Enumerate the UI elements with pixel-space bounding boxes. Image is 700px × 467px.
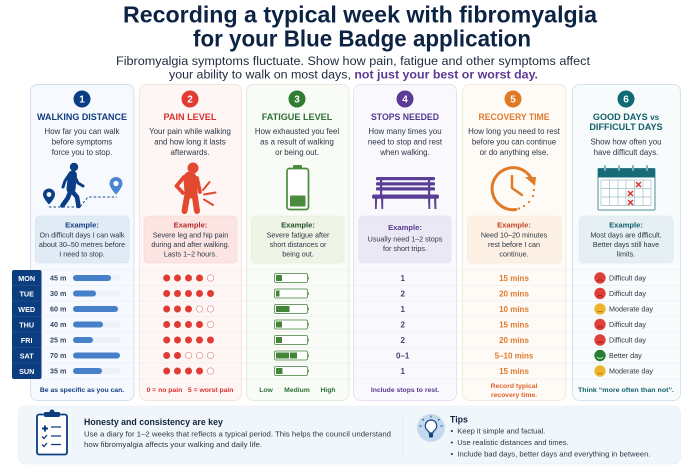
- weekday labels: WED: [18, 305, 35, 314]
- chart: recovery times: [495, 274, 534, 376]
- footer note: 0 = no pain 5 = worst pain: [147, 387, 233, 394]
- icon: person walking between pins: [43, 163, 122, 207]
- description: [149, 127, 231, 157]
- chart: walking distance bars: 40 m: [50, 320, 66, 329]
- chart: stops per day: 2: [400, 336, 405, 345]
- chart: walking distance bars: 25 m: [50, 336, 66, 344]
- example box: during and after walking.: [151, 240, 230, 249]
- body text: honesty: how fibromyalgia affects your walking and daily life.: [84, 440, 262, 449]
- chart: walking distance bars: 30 m: [50, 289, 66, 298]
- panel: walking distance: [30, 84, 134, 400]
- icon: low battery: [287, 165, 308, 210]
- step number 1: [74, 90, 90, 108]
- description: [468, 127, 561, 157]
- step number 6: [618, 90, 634, 108]
- chart: recovery times: 5–10 mins: [495, 352, 534, 360]
- example box: Need 10–20 minutes: [481, 230, 548, 240]
- description: [590, 138, 662, 157]
- example box: limits.: [617, 250, 635, 258]
- example box: [144, 216, 237, 263]
- panel: fatigue level: [246, 84, 349, 400]
- description: How long you need to rest: [468, 127, 561, 136]
- example box: about 30–50 metres before: [39, 240, 125, 249]
- example box: Example:: [609, 220, 643, 230]
- description: before you can continue: [472, 138, 557, 146]
- example box: Example:: [281, 220, 315, 230]
- weekday labels: MON: [18, 274, 35, 283]
- example box: [468, 216, 562, 263]
- icon: calendar: [598, 165, 655, 210]
- example box: I need to stop.: [59, 250, 105, 258]
- chart: walking distance bars: 35 m: [50, 366, 66, 376]
- footer note: recovery time.: [491, 392, 537, 399]
- example box: Usually need 1–2 stops: [368, 234, 443, 244]
- heading: tips: Tips: [450, 414, 468, 424]
- chart: stops per day: 1: [400, 305, 405, 314]
- chart: walking distance bars: 60 m: [50, 304, 66, 314]
- chart: fatigue batteries: [274, 274, 309, 376]
- description: [44, 127, 120, 157]
- chart: day ratings: [594, 272, 653, 377]
- chart: recovery times: 15 mins: [499, 367, 529, 376]
- panel: recovery time: [462, 84, 566, 400]
- example box: [36, 216, 129, 263]
- heading: PAIN LEVEL: [164, 112, 217, 122]
- footer note: [491, 383, 538, 399]
- weekday labels: TUE: [20, 290, 34, 298]
- example box: Severe leg and hip pain: [153, 230, 228, 240]
- heading: STOPS NEEDED: [371, 112, 439, 122]
- step number 2: [182, 90, 198, 108]
- chart: day ratings: Moderate day: [609, 366, 653, 376]
- footer note: Record typical: [491, 383, 538, 390]
- panel: good days vs difficult days: [572, 84, 680, 400]
- description: [368, 127, 443, 157]
- weekday labels: THU: [19, 320, 34, 330]
- panel: stops needed: [354, 84, 456, 400]
- chart: walking distance bars: [50, 274, 121, 376]
- description: afterwards.: [170, 148, 210, 157]
- tips list: • Include bad days, better days and everything in between.: [450, 450, 650, 458]
- subtitle: your ability to walk on most days, not just your best or worst day.: [169, 68, 538, 82]
- subtitle: [116, 54, 591, 82]
- chart: stops per day: 0–1: [396, 352, 410, 360]
- example box: Lasts 1–2 hours.: [164, 250, 217, 258]
- description: [255, 127, 339, 157]
- step number 4: 4: [402, 95, 408, 106]
- chart: walking distance bars: 45 m: [50, 274, 66, 282]
- chart: stops per day: 2: [400, 290, 405, 298]
- footer note: Think “more often than not”.: [578, 387, 674, 394]
- chart: day ratings: Difficult day: [609, 274, 646, 282]
- description: before symptoms: [52, 138, 112, 146]
- heading: honesty: Honesty and consistency are key: [84, 417, 223, 427]
- tips list: • Keep it simple and factual.: [450, 426, 545, 436]
- example box: Most days are difficult.: [590, 230, 662, 240]
- chart: recovery times: 10 mins: [499, 305, 529, 314]
- example box: short distances or: [270, 240, 327, 249]
- example box: being out.: [282, 250, 314, 258]
- heading: DIFFICULT DAYS: [589, 122, 663, 132]
- panel: honesty and tips: [18, 406, 680, 464]
- heading: FATIGUE LEVEL: [262, 112, 333, 122]
- step number 3: [288, 90, 306, 108]
- description: force you to stop.: [52, 148, 112, 157]
- description: and how long it lasts: [154, 138, 226, 146]
- description: or being out.: [275, 148, 319, 157]
- weekday labels: SAT: [20, 352, 34, 360]
- example box: rest before I can: [488, 240, 540, 249]
- chart: day ratings: Moderate day: [609, 304, 653, 314]
- footer legend: [259, 387, 336, 394]
- chart: day ratings: Difficult day: [609, 336, 646, 344]
- chart: stops per day: 1: [400, 274, 405, 283]
- weekday labels: [12, 270, 42, 379]
- footer legend: Medium: [284, 387, 310, 394]
- footer note: Be as specific as you can.: [40, 387, 124, 394]
- description: Your pain while walking: [149, 127, 231, 136]
- footer legend: Low: [259, 387, 274, 394]
- step number 5: 5: [510, 95, 516, 106]
- icon: bench: [372, 177, 439, 209]
- step number 3: 3: [294, 95, 300, 106]
- description: How exhausted you feel: [255, 127, 339, 136]
- step number 6: 6: [623, 95, 629, 106]
- example box: Example:: [388, 223, 422, 232]
- example box: [580, 216, 673, 263]
- chart: stops per day: 1: [400, 367, 405, 376]
- chart: recovery times: 15 mins: [499, 320, 529, 330]
- chart: pain dots: [163, 274, 214, 374]
- heading: GOOD DAYS vs: [593, 112, 660, 122]
- description: Show how often you: [590, 138, 662, 146]
- footer note: Include stops to rest.: [371, 387, 439, 394]
- weekday labels: FRI: [21, 336, 32, 345]
- footer legend: High: [320, 387, 336, 394]
- subtitle: Fibromyalgia symptoms fluctuate. Show how pain, fatigue and other symptoms affect: [116, 54, 591, 68]
- chart: stops per day: 2: [400, 320, 405, 330]
- example box: On difficult days I can walk: [40, 230, 125, 240]
- description: How far you can walk: [44, 127, 120, 136]
- icon: clipboard checklist: [37, 410, 67, 454]
- description: How many times you: [368, 127, 442, 136]
- title: [123, 2, 597, 52]
- icon: light bulb: [417, 414, 445, 442]
- title: Recording a typical week with fibromyalgia: [123, 2, 597, 28]
- tips list: [450, 426, 650, 458]
- chart: recovery times: 20 mins: [499, 290, 529, 298]
- description: or do anything else.: [480, 148, 548, 157]
- example box: Example:: [174, 220, 207, 230]
- step number 1: 1: [79, 95, 85, 106]
- example box: Example:: [497, 220, 531, 230]
- step number 4: [396, 90, 414, 108]
- description: need to stop and rest: [368, 138, 443, 146]
- chart: recovery times: 20 mins: [499, 336, 529, 345]
- example box: for short trips.: [383, 244, 427, 253]
- example box: Example:: [65, 220, 99, 230]
- tips list: • Use realistic distances and times.: [450, 438, 569, 447]
- weekday labels: SUN: [19, 367, 34, 376]
- example box: [252, 216, 344, 263]
- example box: continue.: [499, 250, 529, 258]
- step number 5: [504, 90, 522, 108]
- chart: recovery times: 15 mins: [499, 274, 529, 283]
- heading: RECOVERY TIME: [478, 112, 550, 122]
- chart: day ratings: Difficult day: [609, 320, 646, 329]
- heading: WALKING DISTANCE: [37, 112, 127, 122]
- chart: stops per day: [396, 274, 410, 376]
- example box: Better days still have: [593, 240, 659, 249]
- description: as a result of walking: [260, 138, 334, 146]
- icon: clock with arrow: [492, 168, 536, 210]
- chart: walking distance bars: 70 m: [50, 351, 66, 360]
- heading: [589, 112, 663, 132]
- description: have difficult days.: [594, 148, 658, 157]
- title: for your Blue Badge application: [193, 26, 531, 52]
- example box: Severe fatigue after: [267, 230, 330, 240]
- chart: day ratings: Better day: [609, 351, 642, 360]
- step number 2: 2: [187, 95, 193, 106]
- body text: honesty: [84, 430, 391, 449]
- description: when walking.: [379, 148, 430, 157]
- chart: day ratings: Difficult day: [609, 289, 646, 298]
- panel: pain level: [140, 84, 242, 400]
- body text: honesty: Use a diary for 1–2 weeks that reflects a typical period. This helps the council understand: [84, 430, 391, 438]
- example box: [359, 216, 451, 263]
- icon: person with pain: [176, 162, 216, 211]
